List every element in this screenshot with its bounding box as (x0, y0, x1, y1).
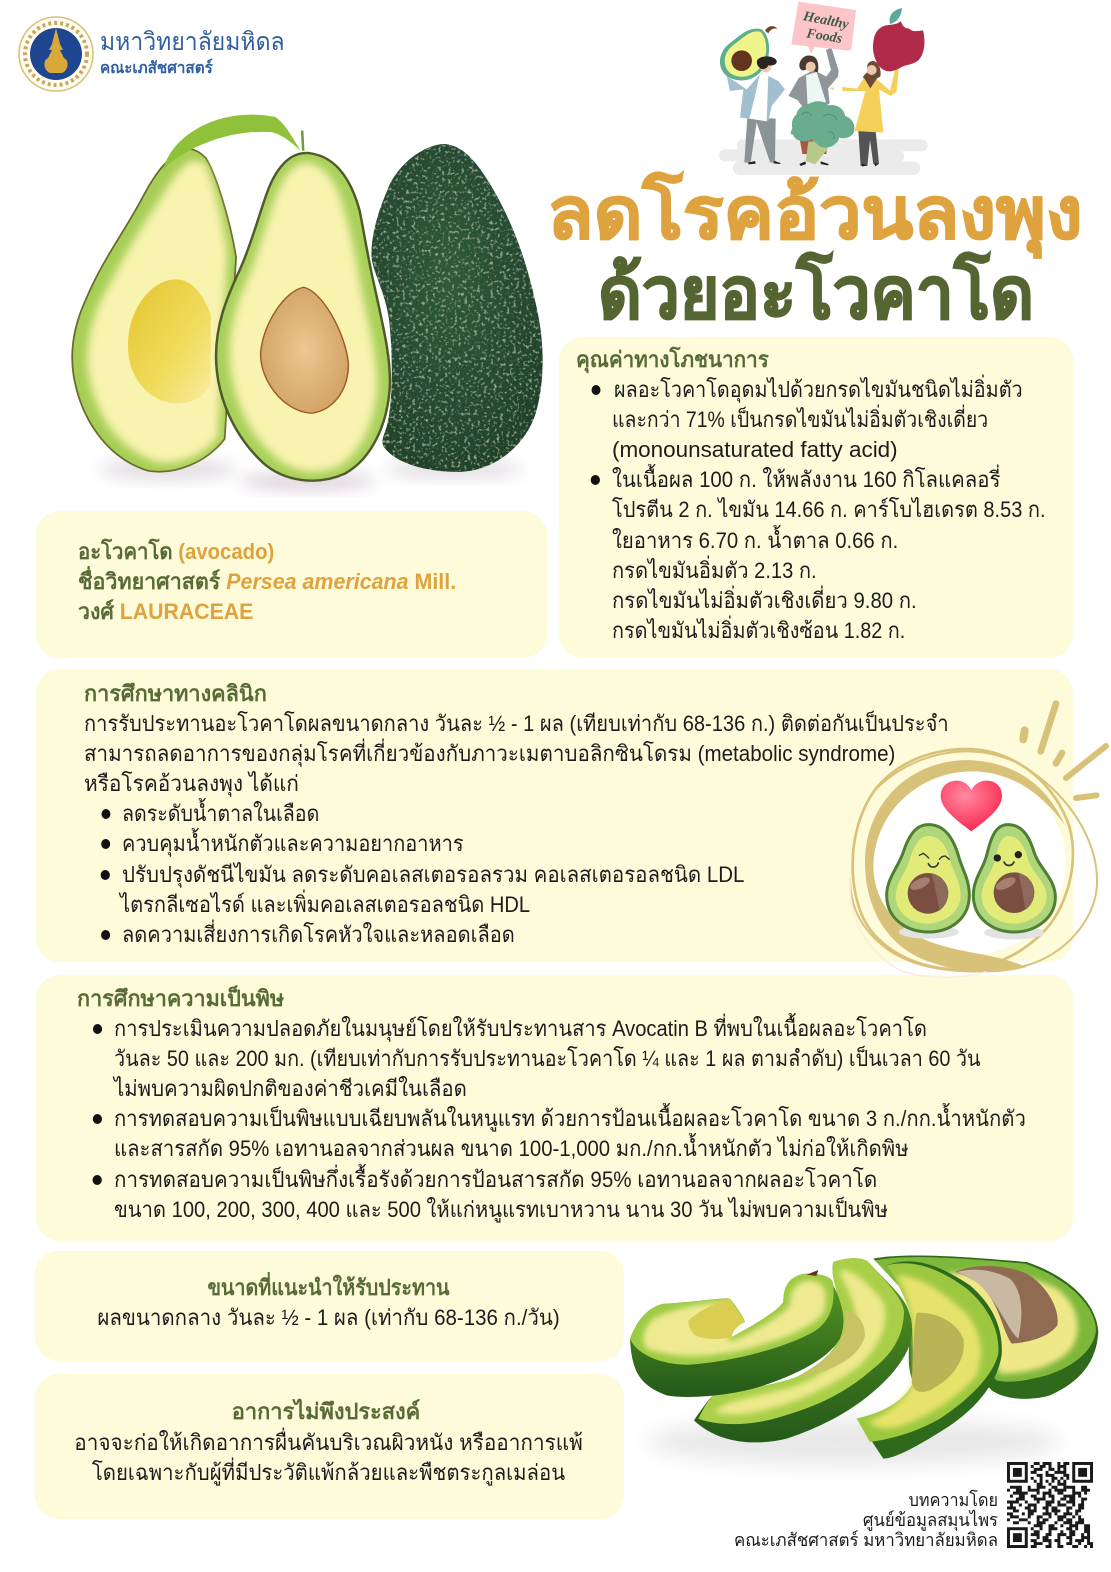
heading: clinical studies: การศึกษาทางคลินิก (84, 681, 267, 706)
list: clinical benefits: ควบคุมน้ำหนักตัวและความอยากอาหาร (122, 831, 464, 856)
title: line 2: ด้วยอะโวคาโด (598, 254, 1034, 334)
title: line 1: ลดโรคอ้วนลงพุง (547, 174, 1083, 254)
illustration: two cute avocados with heart in a ring (849, 700, 1109, 978)
list: nutrition facts: โปรตีน 2 ก. ไขมัน 14.66 ก. คาร์โบไฮเดรต 8.53 ก. (612, 497, 1046, 522)
text: clinical intro (84, 710, 949, 797)
photo: sliced avocado (630, 1256, 1098, 1468)
icon: university seal (18, 16, 94, 92)
list: toxicity findings: การทดสอบความเป็นพิษกึ่งเรื้อรังด้วยการป้อนสารสกัด 95% เอทานอลจากผลอะโวคาโด (114, 1167, 877, 1192)
heading: recommended dose: ขนาดที่แนะนำให้รับประทาน (207, 1275, 450, 1300)
list: toxicity findings: การทดสอบความเป็นพิษแบบเฉียบพลันในหนูแรท ด้วยการป้อนเนื้อผลอะโวคาโด ขนาด 3 ก./กก.น้ำหนักตัว (114, 1106, 1026, 1131)
text: family: วงศ์ LAURACEAE (78, 599, 253, 624)
text: dose value: ผลขนาดกลาง วันละ ½ - 1 ผล (เท่ากับ 68-136 ก./วัน) (97, 1305, 560, 1330)
text: common name: อะโวคาโด (avocado) (78, 539, 274, 564)
text: author credit: ศูนย์ข้อมูลสมุนไพร (863, 1510, 998, 1530)
panel: avocado names (36, 511, 547, 658)
list: nutrition facts: ในเนื้อผล 100 ก. ให้พลังงาน 160 กิโลแคลอรี่ (612, 467, 1000, 492)
text: sign Healthy Foods: Foods (804, 26, 844, 47)
illustration: people holding healthy foods (719, 2, 928, 175)
heading: nutrition: คุณค่าทางโภชนาการ (576, 347, 769, 372)
logo: Mahidol University (18, 16, 285, 92)
list: toxicity findings: การประเมินความปลอดภัยในมนุษย์โดยให้รับประทานสาร Avocatin B ที่พบในเนื้อผลอะโวคาโด (114, 1016, 927, 1041)
icon: avocado left (887, 825, 969, 932)
list: clinical benefits: ลดความเสี่ยงการเกิดโรคหัวใจและหลอดเลือด (122, 922, 515, 947)
panel: recommended dose (35, 1251, 624, 1361)
list: clinical benefits: ลดระดับน้ำตาลในเลือด (122, 801, 319, 826)
text: author credit: บทความโดย (909, 1490, 998, 1510)
list: toxicity findings (92, 1013, 1026, 1223)
text: scientific name: ชื่อวิทยาศาสตร์ Persea americana Mill. (78, 569, 456, 594)
heading: toxicity studies: การศึกษาความเป็นพิษ (77, 986, 284, 1011)
list: nutrition facts: และกว่า 71% เป็นกรดไขมันไม่อิ่มตัวเชิงเดี่ยว (612, 407, 988, 432)
list: nutrition facts: กรดไขมันไม่อิ่มตัวเชิงซ้อน 1.82 ก. (612, 618, 905, 643)
text: sign Healthy Foods: Healthy (801, 9, 851, 33)
text: author credit (734, 1490, 998, 1550)
text: clinical intro: หรือโรคอ้วนลงพุง ได้แก่ (84, 771, 299, 796)
panel: adverse effects (35, 1374, 624, 1519)
panel: toxicity studies (36, 975, 1073, 1241)
heading: adverse effects: อาการไม่พึงประสงค์ (232, 1399, 420, 1424)
slice: third (857, 1261, 1002, 1459)
list: nutrition facts: กรดไขมันไม่อิ่มตัวเชิงเดี่ยว 9.80 ก. (612, 588, 917, 613)
list: nutrition facts: (monounsaturated fatty acid) (612, 437, 898, 462)
list: nutrition facts: กรดไขมันอิ่มตัว 2.13 ก. (612, 558, 817, 583)
list: toxicity findings: วันละ 50 และ 200 มก. (เทียบเท่ากับการรับประทานอะโวคาโด ¼ และ 1 ผล ตามลำดับ) เป็นเวลา 60 วัน (114, 1046, 981, 1071)
list: clinical benefits: ปรับปรุงดัชนีไขมัน ลดระดับคอเลสเตอรอลรวม คอเลสเตอรอลชนิด LDL (122, 862, 744, 887)
text: university name: มหาวิทยาลัยมหิดล (100, 28, 285, 56)
list: nutrition facts (590, 374, 1046, 643)
text: sign Healthy Foods (801, 9, 851, 47)
list: clinical benefits: ไตรกลีเซอไรด์ และเพิ่มคอเลสเตอรอลชนิด HDL (120, 892, 530, 917)
list: toxicity findings: ขนาด 100, 200, 300, 400 และ 500 ให้แก่หนูแรทเบาหวาน นาน 30 วัน ไม่พบความเป็นพิษ (114, 1197, 888, 1222)
panel: clinical studies (36, 669, 1073, 962)
slice: back half with stone (873, 1255, 1098, 1399)
photo: halved avocados and whole avocado (71, 114, 543, 497)
list: toxicity findings: และสารสกัด 95% เอทานอลจากส่วนผล ขนาด 100-1,000 มก./กก.น้ำหนักตัว ไม่ก่อให้เกิดพิษ (114, 1136, 909, 1161)
text: adverse effects description (74, 1428, 583, 1486)
text: clinical intro: การรับประทานอะโวคาโดผลขนาดกลาง วันละ ½ - 1 ผล (เทียบเท่ากับ 68-136 ก.) ติดต่อกันเป็นประจำ (84, 711, 949, 736)
list: clinical benefits (100, 798, 744, 947)
icon: heart (941, 781, 1002, 831)
text: faculty name: คณะเภสัชศาสตร์ (100, 60, 213, 77)
list: nutrition facts: ใยอาหาร 6.70 ก. น้ำตาล 0.66 ก. (612, 528, 898, 553)
text: adverse effects description: อาจจะก่อให้เกิดอาการผื่นคันบริเวณผิวหนัง หรืออาการแพ้ (74, 1430, 583, 1455)
text: author credit: คณะเภสัชศาสตร์ มหาวิทยาลัยมหิดล (734, 1530, 998, 1550)
panel: nutrition values (559, 337, 1073, 658)
icon: avocado right (973, 825, 1055, 932)
slice: front (630, 1274, 843, 1397)
text: adverse effects description: โดยเฉพาะกับผู้ที่มีประวัติแพ้กล้วยและพืชตระกูลเมล่อน (92, 1460, 565, 1485)
QR code (1007, 1462, 1093, 1548)
list: nutrition facts: ผลอะโวคาโดอุดมไปด้วยกรดไขมันชนิดไม่อิ่มตัว (614, 377, 1023, 402)
text: clinical intro: สามารถลดอาการของกลุ่มโรคที่เกี่ยวข้องกับภาวะเมตาบอลิกซินโดรม (metabolic syndrome) (84, 741, 895, 766)
list: toxicity findings: ไม่พบความผิดปกติของค่าชีวเคมีในเลือด (114, 1076, 467, 1101)
slice: second (694, 1258, 912, 1442)
